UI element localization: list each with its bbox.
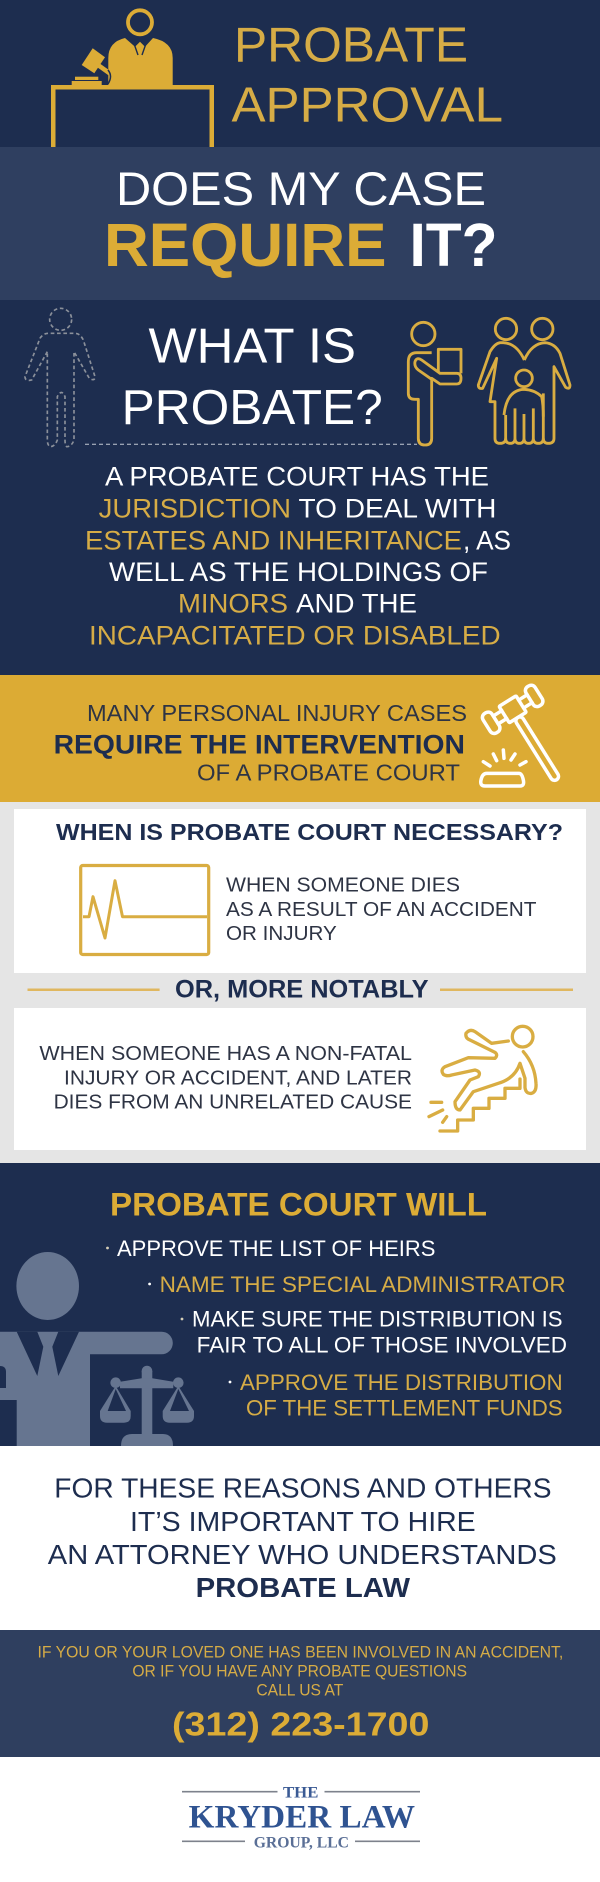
heading: does my case: DOES MY CASE	[116, 162, 486, 215]
text block: intervention statement: REQUIRE THE INTERVENTION	[54, 729, 465, 759]
text block: when someone dies	[226, 875, 536, 945]
heading: probate approval: APPROVAL	[232, 79, 503, 133]
icon: person with document	[408, 322, 461, 445]
heading: when is probate court necessary: WHEN IS PROBATE COURT NECESSARY?	[56, 819, 563, 845]
text block: non-fatal injury: DIES FROM AN UNRELATED CAUSE	[54, 1091, 412, 1113]
panel: question banner	[0, 147, 600, 300]
text block: intervention statement: OF A PROBATE COURT	[197, 760, 460, 786]
phone number: (312) 223-1700	[172, 1707, 429, 1744]
text block: probate court definition: JURISDICTION	[99, 493, 291, 523]
text block: contact prompt	[38, 1643, 563, 1700]
icon: family	[478, 318, 570, 443]
text block: probate court definition: TO DEAL WITH	[298, 493, 496, 523]
panel: personal injury callout	[0, 675, 600, 802]
text block: hire an attorney: FOR THESE REASONS AND OTHERS	[54, 1473, 552, 1504]
heading: what is probate	[122, 320, 383, 435]
text block: probate court definition: WELL AS THE HOLDINGS OF	[109, 557, 488, 587]
icon: white gavel	[481, 683, 583, 796]
divider heading: or, more notably: OR, MORE NOTABLY	[175, 977, 429, 1004]
text block: intervention statement: MANY PERSONAL INJURY CASES	[87, 700, 467, 726]
heading: what is probate: WHAT IS	[148, 320, 356, 374]
dotted connector line	[85, 443, 417, 445]
card: first scenario	[14, 809, 586, 973]
panel: when is probate necessary	[0, 802, 600, 1163]
list: court duties: MAKE SURE THE DISTRIBUTION IS	[192, 1307, 563, 1332]
text block: probate court definition: INCAPACITATED OR DISABLED	[89, 620, 501, 650]
text block: hire an attorney	[48, 1473, 557, 1603]
list: court duties: NAME THE SPECIAL ADMINISTRATOR	[160, 1272, 566, 1297]
icon: person falling on stairs	[429, 1026, 536, 1131]
text block: intervention statement	[54, 700, 467, 786]
text block: hire an attorney: PROBATE LAW	[196, 1572, 411, 1603]
logo: the kryder law group	[182, 1785, 420, 1851]
heading: require it: REQUIRE	[104, 211, 386, 279]
list: court duties: OF THE SETTLEMENT FUNDS	[246, 1396, 563, 1421]
heading: probate approval	[232, 19, 503, 133]
heading: what is probate: PROBATE?	[122, 381, 383, 435]
icon: attorney silhouette with scales	[0, 1252, 194, 1446]
heading: probate court will: PROBATE COURT WILL	[110, 1187, 487, 1223]
text block: hire an attorney: IT’S IMPORTANT TO HIRE	[130, 1506, 476, 1537]
panel: title header	[0, 0, 600, 147]
card: second scenario	[14, 1008, 586, 1150]
text block: hire an attorney: AN ATTORNEY WHO UNDERSTANDS	[48, 1539, 557, 1570]
logo: the kryder law group: THE	[283, 1785, 318, 1802]
panel: call to action	[0, 1630, 600, 1757]
list: court duties	[106, 1236, 567, 1421]
text block: when someone dies: WHEN SOMEONE DIES	[226, 875, 460, 897]
text block: probate court definition: , AS	[463, 525, 511, 555]
list: court duties: FAIR TO ALL OF THOSE INVOLVED	[197, 1333, 567, 1358]
list: court duties: APPROVE THE DISTRIBUTION	[240, 1370, 563, 1395]
text block: contact prompt: IF YOU OR YOUR LOVED ONE HAS BEEN INVOLVED IN AN ACCIDENT,	[38, 1643, 563, 1662]
text block: when someone dies: OR INJURY	[226, 923, 337, 945]
text block: probate court definition: ESTATES AND INHERITANCE	[85, 525, 462, 555]
text block: contact prompt: CALL US AT	[256, 1681, 343, 1700]
panel: probate court will	[0, 1163, 600, 1446]
logo: the kryder law group: KRYDER LAW	[189, 1799, 415, 1835]
heading: require it: IT?	[410, 211, 498, 279]
icon: judge at bench	[51, 10, 214, 147]
text block: non-fatal injury: WHEN SOMEONE HAS A NON-FATAL	[39, 1043, 412, 1065]
icon: dashed person outline	[25, 308, 95, 447]
text block: probate court definition: A PROBATE COURT HAS THE	[105, 462, 489, 492]
heading: probate approval: PROBATE	[234, 19, 468, 73]
panel: what is probate	[0, 300, 600, 675]
text block: contact prompt: OR IF YOU HAVE ANY PROBATE QUESTIONS	[132, 1662, 467, 1681]
icon: heart monitor	[81, 866, 209, 954]
text block: non-fatal injury	[39, 1043, 412, 1113]
text block: when someone dies: AS A RESULT OF AN ACCIDENT	[226, 899, 536, 921]
list: court duties: APPROVE THE LIST OF HEIRS	[117, 1236, 436, 1261]
text block: non-fatal injury: INJURY OR ACCIDENT, AND LATER	[64, 1067, 412, 1089]
text block: probate court definition	[85, 462, 511, 650]
text block: probate court definition: MINORS	[178, 589, 288, 619]
logo: the kryder law group: GROUP, LLC	[254, 1834, 349, 1851]
text block: probate court definition: AND THE	[296, 589, 417, 619]
